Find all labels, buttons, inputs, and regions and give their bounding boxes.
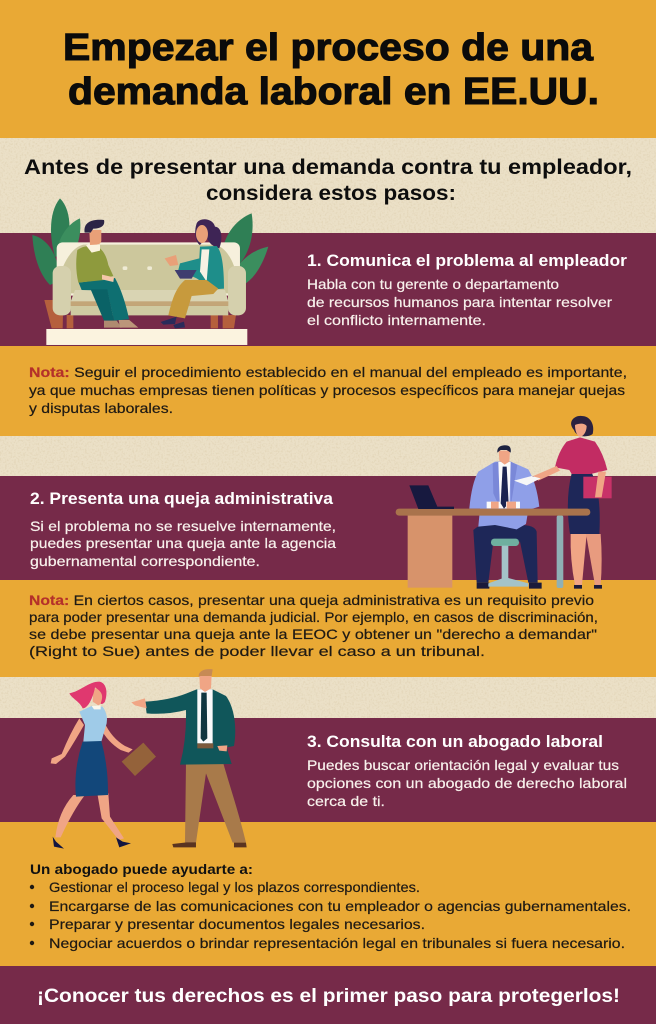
- intro heading: [24, 156, 632, 205]
- step 2 text: puedes presentar una queja ante la agencia: [30, 535, 336, 551]
- pots and legs: [44, 300, 236, 328]
- lawyer help list: Un abogado puede ayudarte a:: [30, 862, 253, 877]
- briefcase: [122, 743, 156, 776]
- illustration: two people talking on a sofa: [32, 198, 268, 345]
- background: maroon footer band: [0, 966, 656, 1024]
- sofa: [53, 242, 246, 315]
- note 1: Nota: Seguir el procedimiento establecido en el manual del empleado es importante,: [29, 364, 627, 380]
- step 2 text: [30, 490, 336, 569]
- note 2: [29, 592, 598, 659]
- step 1 text: el conflicto internamente.: [307, 312, 486, 328]
- background: maroon band step 2: [0, 476, 656, 580]
- background: maroon band step 1: [0, 233, 656, 346]
- man seated: [469, 445, 542, 589]
- background: orange band note 2: [0, 580, 656, 677]
- intro heading: Antes de presentar una demanda contra tu empleador,: [24, 156, 632, 179]
- background: orange band note 1: [0, 346, 656, 436]
- background: maroon band step 3: [0, 718, 656, 822]
- title: Empezar el proceso de una: [63, 27, 594, 69]
- note 2: se debe presentar una queja ante la EEOC y obtener un "derecho a demandar": [29, 626, 597, 642]
- lawyer help list: Negociar acuerdos o brindar representación legal en tribunales si fuera necesario.: [49, 935, 625, 951]
- note 1: y disputas laborales.: [29, 400, 173, 416]
- note 1: ya que muchas empresas tienen políticas y procesos específicos para manejar quejas: [29, 382, 625, 398]
- background: beige band step 2: [0, 436, 656, 476]
- note 2: (Right to Sue) antes de poder llevar el caso a un tribunal.: [29, 643, 485, 659]
- desk: [396, 509, 590, 588]
- note 1: [29, 364, 627, 416]
- title: [63, 27, 599, 113]
- background: orange band lawyer list: [0, 822, 656, 966]
- woman walking: [51, 682, 133, 849]
- illustration: man at desk and woman handing a paper: [396, 416, 612, 589]
- step 3 text: Puedes buscar orientación legal y evaluar tus: [307, 757, 619, 773]
- step 3 text: 3. Consulta con un abogado laboral: [307, 733, 603, 751]
- step 2 text: 2. Presenta una queja administrativa: [30, 490, 334, 508]
- intro heading: considera estos pasos:: [206, 182, 456, 205]
- lawyer help list: Preparar y presentar documentos legales necesarios.: [49, 916, 425, 932]
- lawyer help list: Gestionar el proceso legal y los plazos correspondientes.: [49, 879, 420, 895]
- step 1 text: Habla con tu gerente o departamento: [307, 276, 559, 292]
- plants: [32, 198, 268, 285]
- stool: [488, 539, 528, 587]
- lawyer help list: [30, 862, 631, 951]
- title: demanda laboral en EE.UU.: [68, 71, 599, 113]
- background: beige band intro: [0, 138, 656, 233]
- step 1 text: de recursos humanos para intentar resolver: [307, 294, 612, 310]
- step 2 text: gubernamental correspondiente.: [30, 553, 260, 569]
- step 3 text: cerca de ti.: [307, 793, 385, 809]
- note 2: para poder presentar una demanda judicial. Por ejemplo, en casos de discriminación,: [29, 609, 598, 625]
- woman standing: [533, 416, 612, 589]
- background: orange title band: [0, 0, 656, 138]
- background: beige band step 3: [0, 677, 656, 718]
- step 3 text: [307, 733, 627, 809]
- step 1 text: [307, 252, 628, 328]
- step 1 text: 1. Comunica el problema al empleador: [307, 252, 628, 270]
- note 2: Nota: En ciertos casos, presentar una queja administrativa es un requisito previo: [29, 592, 594, 608]
- white platform: [46, 329, 247, 345]
- step 3 text: opciones con un abogado de derecho laboral: [307, 775, 627, 791]
- woman with teal jacket: [161, 219, 224, 328]
- man pointing: [131, 669, 247, 847]
- man in green sweater: [76, 220, 138, 328]
- footer message: ¡Conocer tus derechos es el primer paso para protegerlos!: [37, 985, 620, 1007]
- step 2 text: Si el problema no se resuelve internamente,: [30, 518, 336, 534]
- illustration: man pointing and woman walking away: [51, 669, 247, 849]
- lawyer help list: Encargarse de las comunicaciones con tu empleador o agencias gubernamentales.: [49, 898, 631, 914]
- laptop: [409, 485, 454, 509]
